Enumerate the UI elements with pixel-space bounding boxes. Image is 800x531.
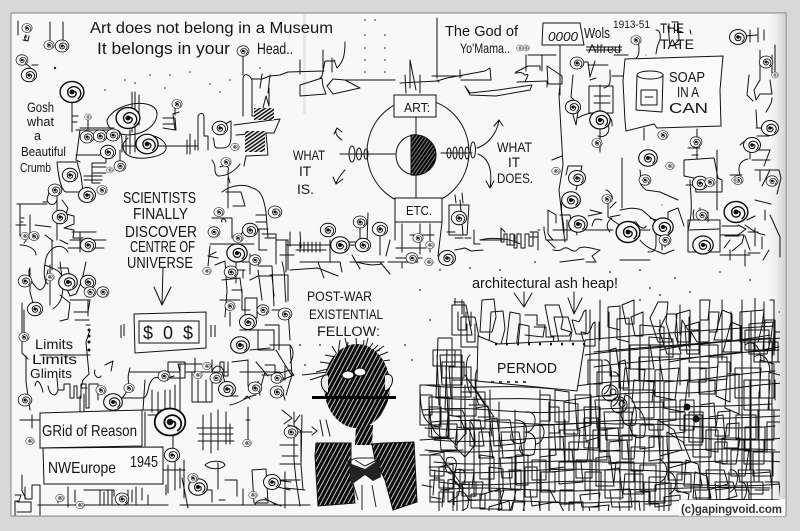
note: gosh what a beautiful crumb: a [34,129,41,143]
sign: pernod [477,336,585,391]
panel: grid of reason [40,410,142,448]
text: the tate: THE [660,20,684,36]
icon: soap can [636,71,663,112]
main text panel: scientists finally discover [123,190,197,272]
panel: NW Europe 1945: NWEurope [48,460,116,477]
heading: architectural ash heap: architectural ash heap! [472,275,618,292]
panel: soap in a can [623,56,723,131]
label: 0000 box and names: Alfred [588,42,621,56]
circuitry: right side wiring [400,18,781,266]
text: what it is: IT [299,164,311,179]
note: gosh what a beautiful crumb: Beautiful [21,144,66,159]
text: limits limits glimits [30,336,77,381]
note: gosh what a beautiful crumb: Crumb [20,160,51,175]
text: post-war existential fellow: FELLOW: [317,324,380,339]
figure: existential fellow [302,338,417,510]
text: post-war existential fellow: EXISTENTIAL [309,307,383,322]
main text panel: scientists finally discover: UNIVERSE [127,255,193,272]
dot clusters [54,19,751,366]
sign: pernod: PERNOD [497,360,557,377]
text: what it does [497,140,533,186]
text: soap in a can: SOAP [669,70,705,86]
top text: the god of yo mama: The God of [445,23,519,40]
text: the tate [660,20,694,52]
panel: grid of reason: GRid of Reason [42,423,137,440]
text: what it is: WHAT [293,148,325,163]
text: limits limits glimits: Limits [32,351,77,367]
label: etc box: ETC. [406,203,432,218]
main text panel: scientists finally discover: SCIENTISTS [123,190,196,207]
main text panel: scientists finally discover: FINALLY [133,206,188,223]
icon: arrow down to money [154,268,171,305]
text: what it is [293,148,325,197]
text: limits limits glimits: Limits [35,336,73,352]
text: what it does: WHAT [497,140,532,155]
text: what it does: IT [508,155,520,170]
text: post-war existential fellow [307,289,383,339]
label: 0000 box and names: 0000 [548,29,579,44]
panel: zero dollars note [121,312,215,353]
label: 0000 box and names: Wols [584,25,610,42]
text: soap in a can: IN A [677,85,699,101]
label: art box: ART: [404,100,430,115]
note: gosh what a beautiful crumb [20,99,66,175]
title: art does not belong: Head.. [257,41,293,58]
text: limits limits glimits: Glimits [30,366,73,381]
label: etc box [395,198,442,222]
watermark: gapingvoid: (c)gapingvoid.com [681,504,782,516]
text: what it does: DOES. [497,171,533,186]
top text: the god of yo mama: Yo'Mama.. [460,40,510,56]
label: 0000 box and names: 1913-51 [613,19,650,31]
text: the tate: TATE [660,36,694,52]
text: what it is: IS. [297,182,314,197]
icon: arrows into heap [514,292,582,314]
text: post-war existential fellow: POST-WAR [307,289,372,304]
note: gosh what a beautiful crumb: Gosh [27,99,54,115]
note: gosh what a beautiful crumb: what [26,114,54,129]
label: 0000 box and names [542,19,650,56]
panel: NW Europe 1945: 1945 [130,454,158,471]
label: art box [394,95,436,117]
panel: zero dollars note: $0$ [143,323,193,343]
top text: the god of yo mama [445,23,519,56]
text: soap in a can [669,70,708,117]
text: soap in a can: CAN [669,101,708,117]
title: art does not belong: It belongs in your [97,40,231,58]
main text panel: scientists finally discover: DISCOVER [125,224,197,241]
circuitry: extra dense wiring [16,150,771,400]
architectural ash heap scribble [420,290,784,522]
panel: NW Europe 1945 [43,447,163,484]
title: art does not belong [90,20,333,58]
circuitry: top and left wiring [17,21,395,428]
title: art does not belong: Art does not belong in a Museum [90,20,333,37]
grid of lines [15,380,330,515]
central diagram: art and etc [333,99,503,205]
main text panel: scientists finally discover: CENTRE OF [130,239,195,256]
